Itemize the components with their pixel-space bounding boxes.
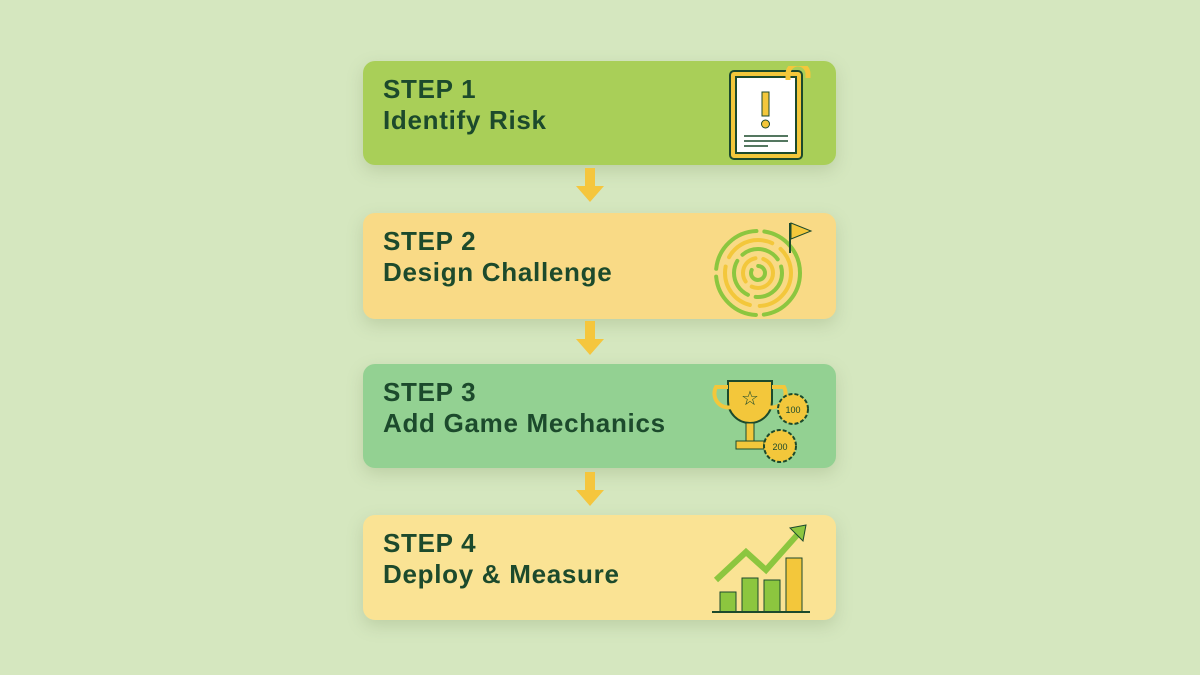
heading: step 1 <box>383 74 547 135</box>
icon: trophy and badges: 200 <box>772 442 788 452</box>
icon: maze <box>714 222 812 317</box>
panel: step 2 <box>363 213 836 319</box>
heading: step 2 <box>383 226 612 287</box>
heading: step 3: STEP 3 <box>383 377 476 407</box>
icon: growth chart <box>712 524 810 613</box>
heading: step 2: STEP 2 <box>383 226 476 256</box>
icon: trophy and badges: 100 <box>785 405 801 415</box>
heading: step 3 <box>383 377 666 438</box>
heading: step 4 <box>383 528 620 589</box>
heading: step 4: Deploy & Measure <box>383 559 620 589</box>
arrow 1 <box>576 168 604 202</box>
heading: step 4: STEP 4 <box>383 528 476 558</box>
arrow 3 <box>576 472 604 506</box>
icon: trophy and badges: ☆ <box>741 388 759 410</box>
panel: step 3 <box>363 364 836 468</box>
icon: trophy and badges <box>712 380 809 463</box>
heading: step 2: Design Challenge <box>383 257 612 287</box>
icon: risk document <box>729 66 810 160</box>
heading: step 1: STEP 1 <box>383 74 476 104</box>
heading: step 1: Identify Risk <box>383 105 547 135</box>
arrow 2 <box>576 321 604 355</box>
heading: step 3: Add Game Mechanics <box>383 408 666 438</box>
panel: step 1 <box>363 61 836 165</box>
panel: step 4 <box>363 515 836 620</box>
